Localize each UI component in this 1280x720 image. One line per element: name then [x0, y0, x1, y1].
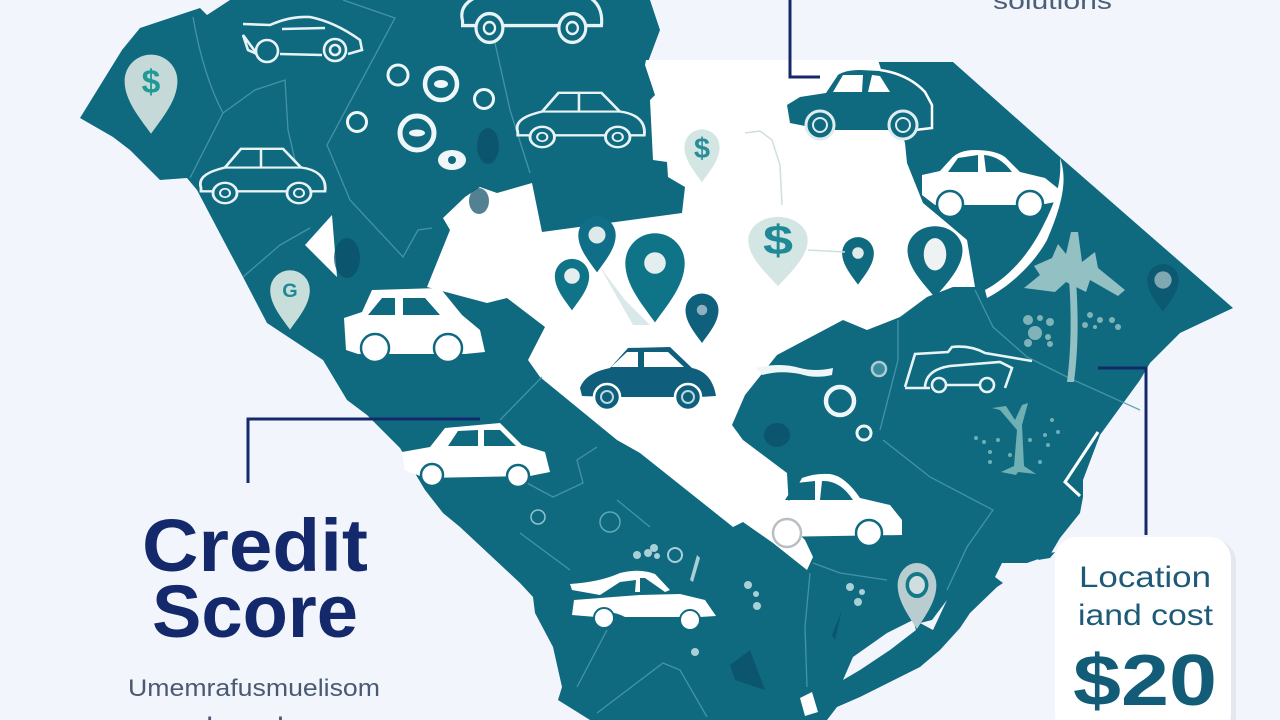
palm tree [1024, 232, 1125, 382]
car dark center [580, 347, 716, 410]
dark smudge icons [334, 128, 842, 690]
card label second line: iand cost [1078, 599, 1214, 632]
coin cluster north [348, 65, 494, 170]
callout line: location [1098, 368, 1146, 535]
card: location and cost [1055, 537, 1236, 720]
pin dollar large [748, 217, 808, 286]
coin cluster east [756, 362, 886, 440]
cars [200, 0, 1060, 630]
subtitle line one: Umemrafusmuelisom [128, 675, 380, 702]
car outline upper middle [517, 93, 644, 147]
pin light west [270, 270, 310, 330]
pin south [898, 563, 936, 629]
tree [974, 403, 1060, 475]
card price: $20 [1073, 641, 1217, 720]
pin dollar small [684, 129, 720, 182]
pin dollar NW [125, 55, 177, 134]
pin dollar large: $ [763, 217, 793, 264]
car outline top [462, 0, 602, 42]
pin far right [908, 226, 962, 298]
car outline east [905, 347, 1032, 392]
callout line: credit score [248, 419, 480, 483]
card shadow [1058, 540, 1236, 720]
coin icons [348, 65, 886, 440]
small flower cluster south [531, 510, 865, 656]
pin dollar NW: $ [142, 64, 161, 101]
car outline west [200, 149, 325, 203]
pin shadow [600, 267, 650, 325]
car white south-west [402, 423, 550, 487]
car outline NW [243, 17, 362, 62]
car white south [570, 571, 716, 630]
card body [1055, 537, 1231, 720]
speckles near palm [1023, 312, 1121, 347]
callout line: top [790, 0, 820, 77]
title line score: Score [152, 570, 358, 653]
pin dark east [1147, 264, 1179, 312]
car white south-east [770, 474, 902, 547]
central white region [427, 60, 975, 570]
coast stripes [985, 158, 1064, 298]
title line credit: Credit [142, 504, 368, 587]
car white west [344, 288, 485, 362]
pin lower [686, 294, 718, 343]
subtitle text [128, 675, 380, 720]
pin upper left [578, 216, 616, 272]
county lines [190, 0, 1140, 717]
title: credit score [142, 504, 368, 653]
pin light west: G [282, 280, 298, 302]
location pins [125, 55, 1179, 629]
pin right [842, 237, 874, 285]
pin left [555, 259, 589, 310]
pin dollar small: $ [694, 133, 710, 165]
pin large [625, 233, 685, 322]
card label: Location [1079, 561, 1211, 594]
pin connector lines [745, 131, 845, 252]
car white east [922, 150, 1060, 217]
car dark north [787, 70, 932, 139]
